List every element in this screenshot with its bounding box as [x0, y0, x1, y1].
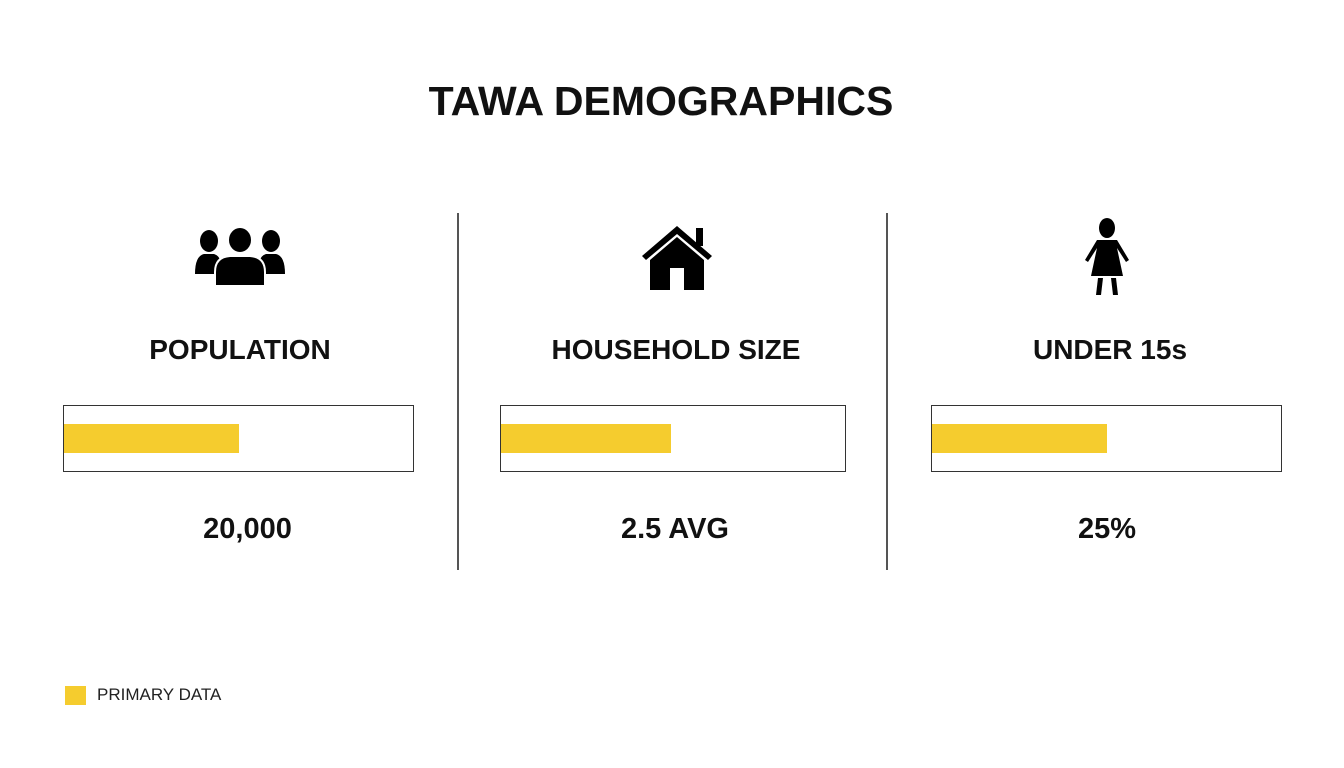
bar: under 15s — [931, 405, 1282, 472]
icon: child — [1085, 218, 1129, 295]
label: HOUSEHOLD SIZE — [552, 334, 800, 365]
panel: household — [552, 226, 800, 545]
panel: under 15s — [1033, 218, 1187, 545]
label: UNDER 15s — [1033, 334, 1187, 365]
value: 2.5 AVG — [621, 513, 729, 545]
value: 20,000 — [203, 513, 292, 545]
icon: house — [642, 226, 712, 290]
bar: household — [500, 405, 846, 472]
bar: population — [63, 405, 414, 472]
divider — [457, 213, 458, 570]
label: POPULATION — [149, 334, 331, 365]
legend: PRIMARY DATA — [97, 685, 221, 704]
icon: people — [195, 228, 285, 285]
value: 25% — [1078, 513, 1136, 545]
title: TAWA DEMOGRAPHICS — [429, 78, 893, 124]
panel: population — [149, 228, 331, 545]
